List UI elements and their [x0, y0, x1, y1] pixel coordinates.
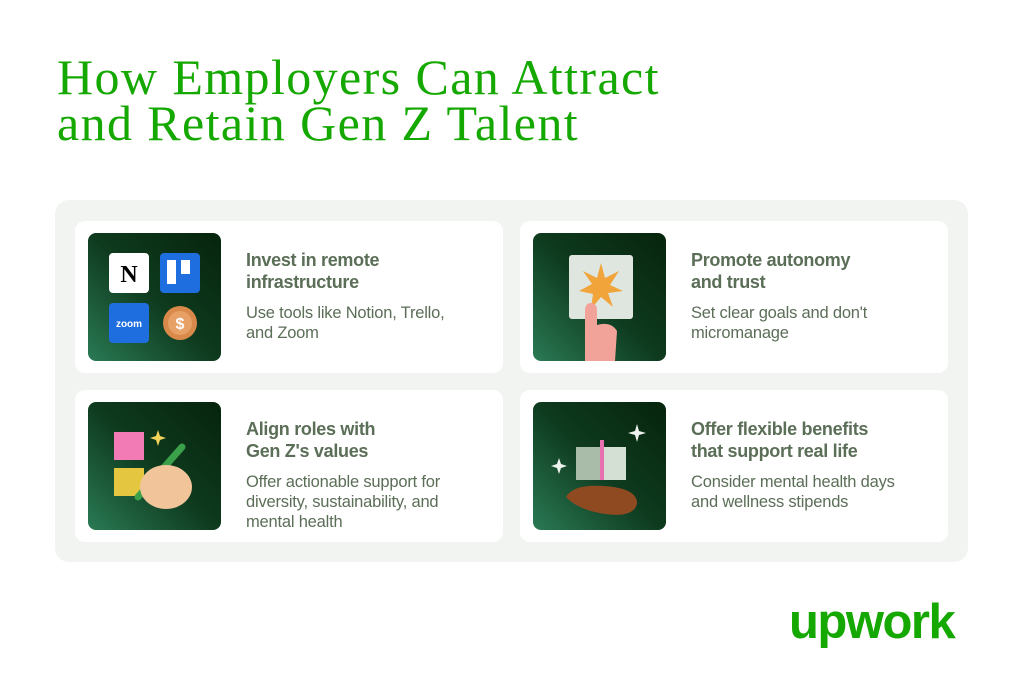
card: autonomy: [520, 221, 948, 373]
body text: Offer actionable support for diversity, sustainability, and mental health: [246, 473, 440, 531]
title: and Retain Gen Z Talent: [57, 95, 579, 151]
icon: gift in hand: [533, 402, 666, 530]
body text: Consider mental health days and wellness stipends: [691, 473, 895, 511]
heading: Align roles with: [246, 419, 375, 439]
card: benefits: [520, 390, 948, 542]
title: [57, 49, 660, 151]
logo: upwork: upwork: [789, 595, 954, 649]
card: values: [75, 390, 503, 542]
card: remote infrastructure: [75, 221, 503, 373]
heading: Gen Z's values: [246, 441, 368, 461]
heading: [246, 419, 375, 461]
icon: app tiles: $: [176, 316, 185, 333]
heading: Offer flexible benefits: [691, 419, 868, 439]
heading: infrastructure: [246, 272, 359, 292]
body text: Set clear goals and don't micromanage: [691, 304, 867, 342]
heading: Invest in remote: [246, 250, 379, 270]
icon: sticky notes: [88, 402, 221, 530]
icon: button press: [533, 233, 666, 361]
heading: [691, 419, 868, 461]
title: How Employers Can Attract: [57, 49, 660, 105]
icon: app tiles: N: [120, 262, 138, 288]
icon: app tiles: zoom: [116, 319, 142, 330]
heading: [246, 250, 379, 292]
body text: Use tools like Notion, Trello, and Zoom: [246, 304, 445, 342]
heading: Promote autonomy: [691, 250, 850, 270]
heading: and trust: [691, 272, 765, 292]
panel: background: [55, 200, 968, 562]
icon: app tiles: [88, 233, 221, 361]
heading: that support real life: [691, 441, 857, 461]
heading: [691, 250, 850, 292]
